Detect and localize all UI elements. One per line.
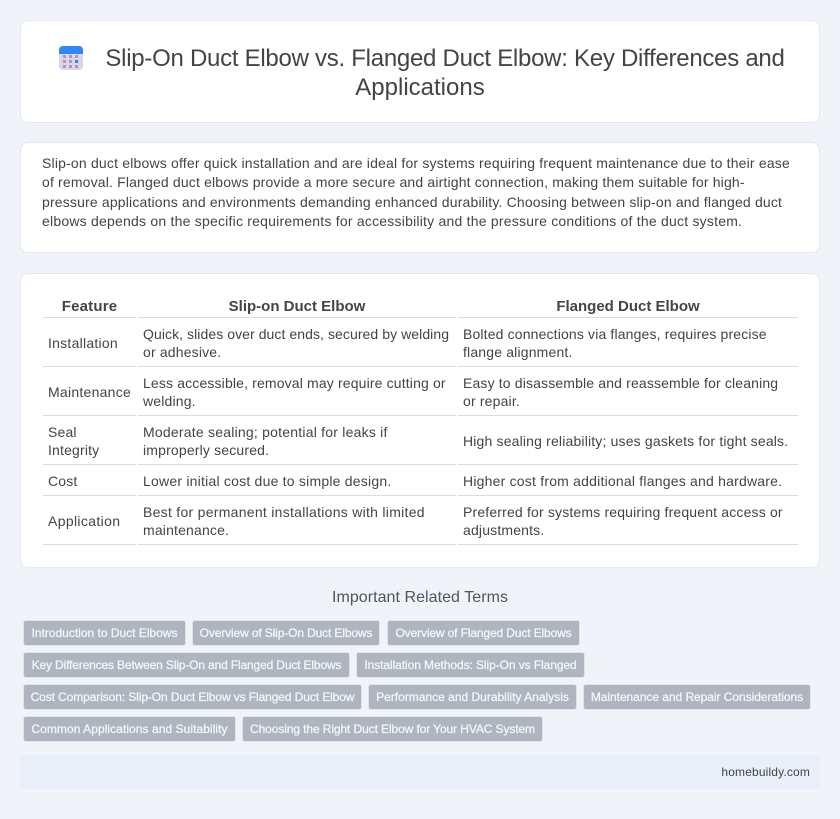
related term tags: Common Applications and Suitability bbox=[31, 722, 228, 736]
row: installation: Quick, slides over duct ends, secured by welding bbox=[143, 326, 449, 342]
row: installation bbox=[48, 326, 767, 360]
related term tags: Overview of Flanged Duct Elbows bbox=[395, 626, 572, 640]
panel: introduction bbox=[20, 142, 820, 253]
table rules bbox=[43, 317, 798, 545]
row: seal integrity: Seal bbox=[48, 424, 77, 440]
intro text: pressure applications and environments demanding enhanced durability. Choosing between slip-on and flanged duct bbox=[42, 194, 782, 210]
footer brand: homebuildy.com bbox=[721, 765, 810, 779]
row: cost bbox=[48, 473, 782, 489]
row: application: Preferred for systems requiring frequent access or bbox=[463, 504, 783, 520]
intro text: Slip-on duct elbows offer quick installation and are ideal for systems requiring frequent maintenance due to their ease bbox=[42, 155, 790, 171]
related term tags: Introduction to Duct Elbows bbox=[31, 626, 178, 640]
row: cost: Higher cost from additional flanges and hardware. bbox=[463, 473, 782, 489]
related term tags: Cost Comparison: Slip-On Duct Elbow vs Flanged Duct Elbow bbox=[31, 690, 354, 704]
table header: Slip-on Duct Elbow bbox=[229, 298, 365, 315]
panel: title card bbox=[20, 20, 820, 123]
related term tags: Overview of Slip-On Duct Elbows bbox=[200, 626, 372, 640]
title bbox=[105, 45, 785, 101]
table header bbox=[62, 298, 700, 315]
row: application: maintenance. bbox=[143, 522, 229, 538]
row: seal integrity: improperly secured. bbox=[143, 442, 269, 458]
intro text: of removal. Flanged duct elbows provide a more secure and airtight connection, making them suitable for high- bbox=[42, 174, 745, 190]
icon: calendar bbox=[59, 46, 83, 70]
related term tags: Key Differences Between Slip-On and Flanged Duct Elbows bbox=[32, 658, 341, 672]
related term tags: Maintenance and Repair Considerations bbox=[591, 690, 803, 704]
row: installation: or adhesive. bbox=[143, 344, 221, 360]
row: installation: Installation bbox=[48, 335, 118, 351]
row: application: adjustments. bbox=[463, 522, 544, 538]
row: seal integrity: Integrity bbox=[48, 442, 99, 458]
title: Slip-On Duct Elbow vs. Flanged Duct Elbow: Key Differences and bbox=[105, 45, 785, 72]
row: maintenance: Less accessible, removal may require cutting or bbox=[143, 375, 446, 391]
panel: comparison table bbox=[20, 273, 820, 568]
row: maintenance: Easy to disassemble and reassemble for cleaning bbox=[463, 375, 778, 391]
intro text: elbows depends on the specific requirements for accessibility and the pressure conditions of the duct system. bbox=[42, 213, 742, 229]
intro text bbox=[42, 155, 790, 229]
table header: Feature bbox=[62, 298, 117, 315]
row: installation: flange alignment. bbox=[463, 344, 573, 360]
row: cost: Cost bbox=[48, 473, 77, 489]
related term tags: Performance and Durability Analysis bbox=[376, 690, 569, 704]
table header: Flanged Duct Elbow bbox=[556, 298, 700, 315]
row: cost: Lower initial cost due to simple design. bbox=[143, 473, 391, 489]
row: application: Best for permanent installations with limited bbox=[143, 504, 425, 520]
footer bbox=[20, 755, 820, 789]
heading: related terms: Important Related Terms bbox=[332, 589, 508, 606]
related term tags: Installation Methods: Slip-On vs Flanged bbox=[364, 658, 577, 672]
title: Applications bbox=[355, 74, 485, 101]
row: application: Application bbox=[48, 513, 120, 529]
row: installation: Bolted connections via flanges, requires precise bbox=[463, 326, 767, 342]
related term tags bbox=[23, 620, 811, 742]
row: seal integrity: High sealing reliability; uses gaskets for tight seals. bbox=[463, 433, 788, 449]
related term tags: Choosing the Right Duct Elbow for Your HVAC System bbox=[250, 722, 535, 736]
row: application bbox=[48, 504, 783, 538]
row: maintenance bbox=[48, 375, 778, 409]
row: maintenance: Maintenance bbox=[48, 384, 131, 400]
row: seal integrity: Moderate sealing; potential for leaks if bbox=[143, 424, 388, 440]
row: maintenance: welding. bbox=[143, 393, 196, 409]
row: maintenance: or repair. bbox=[463, 393, 520, 409]
row: seal integrity bbox=[48, 424, 788, 458]
